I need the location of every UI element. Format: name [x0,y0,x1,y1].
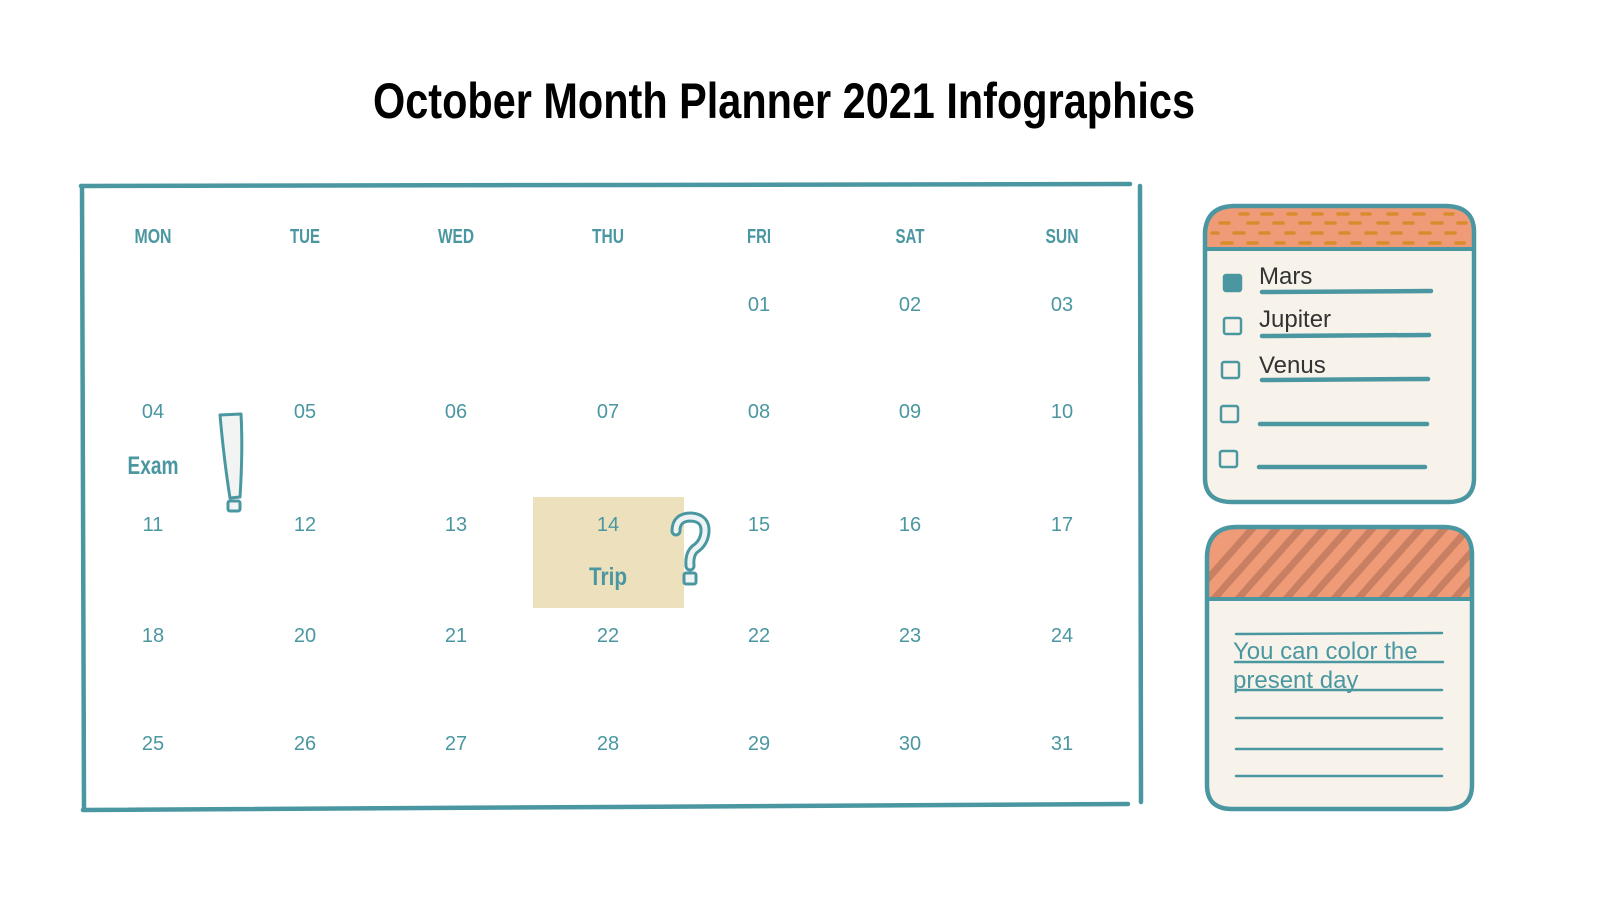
day numbers: 15 [748,514,770,536]
day numbers: 27 [445,733,467,755]
event labels [128,452,627,591]
weekday headers: THU [592,226,624,248]
header band dotted [1207,208,1472,247]
day numbers: 29 [748,733,770,755]
day numbers: 22 [748,625,770,647]
day numbers: 08 [748,401,770,423]
panel: note [1204,524,1474,812]
weekday headers: SUN [1046,226,1078,248]
event labels: Trip [589,563,627,591]
note text: You can color the [1233,638,1418,665]
day numbers: 26 [294,733,316,755]
weekday headers [134,226,1078,248]
calendar border [81,184,1141,810]
highlight: present day [533,497,684,608]
header band striped [1209,529,1470,597]
day numbers: 30 [899,733,921,755]
day numbers: 13 [445,514,467,536]
weekday headers: TUE [290,226,320,248]
day numbers: 20 [294,625,316,647]
note text: present day [1233,667,1358,694]
day numbers: 02 [899,294,921,316]
day numbers: 05 [294,401,316,423]
checklist items: Jupiter [1259,306,1331,333]
day numbers: 01 [748,294,770,316]
day numbers: 14 [597,514,619,536]
day numbers: 09 [899,401,921,423]
day numbers: 22 [597,625,619,647]
weekday headers: MON [134,226,172,248]
day numbers: 10 [1051,401,1073,423]
day numbers: 21 [445,625,467,647]
checkboxes [1220,275,1241,467]
day numbers: 16 [899,514,921,536]
underlines [1259,291,1431,467]
day numbers: 28 [597,733,619,755]
weekday headers: FRI [747,226,771,248]
day numbers: 24 [1051,625,1073,647]
weekday headers: WED [438,226,474,248]
day numbers: 23 [899,625,921,647]
day numbers: 25 [142,733,164,755]
note text [1233,638,1418,694]
icon: question mark [676,517,705,584]
day numbers: 04 [142,401,164,423]
day numbers: 03 [1051,294,1073,316]
day numbers: 12 [294,514,316,536]
day numbers [142,294,1073,755]
day numbers: 31 [1051,733,1073,755]
title: October Month Planner 2021 Infographics [373,73,1195,129]
checklist items: Mars [1259,263,1312,290]
note lines [1235,633,1443,776]
day numbers: 11 [143,514,163,536]
calendar panel [81,184,1141,810]
checklist items [1259,263,1331,379]
day numbers: 06 [445,401,467,423]
checklist items: Venus [1259,352,1326,379]
icon: exclamation [220,414,242,511]
weekday headers: SAT [896,226,924,248]
day numbers: 18 [142,625,164,647]
day numbers: 17 [1051,514,1073,536]
panel: checklist [1200,200,1480,502]
day numbers: 07 [597,401,619,423]
event labels: Exam [128,452,178,480]
